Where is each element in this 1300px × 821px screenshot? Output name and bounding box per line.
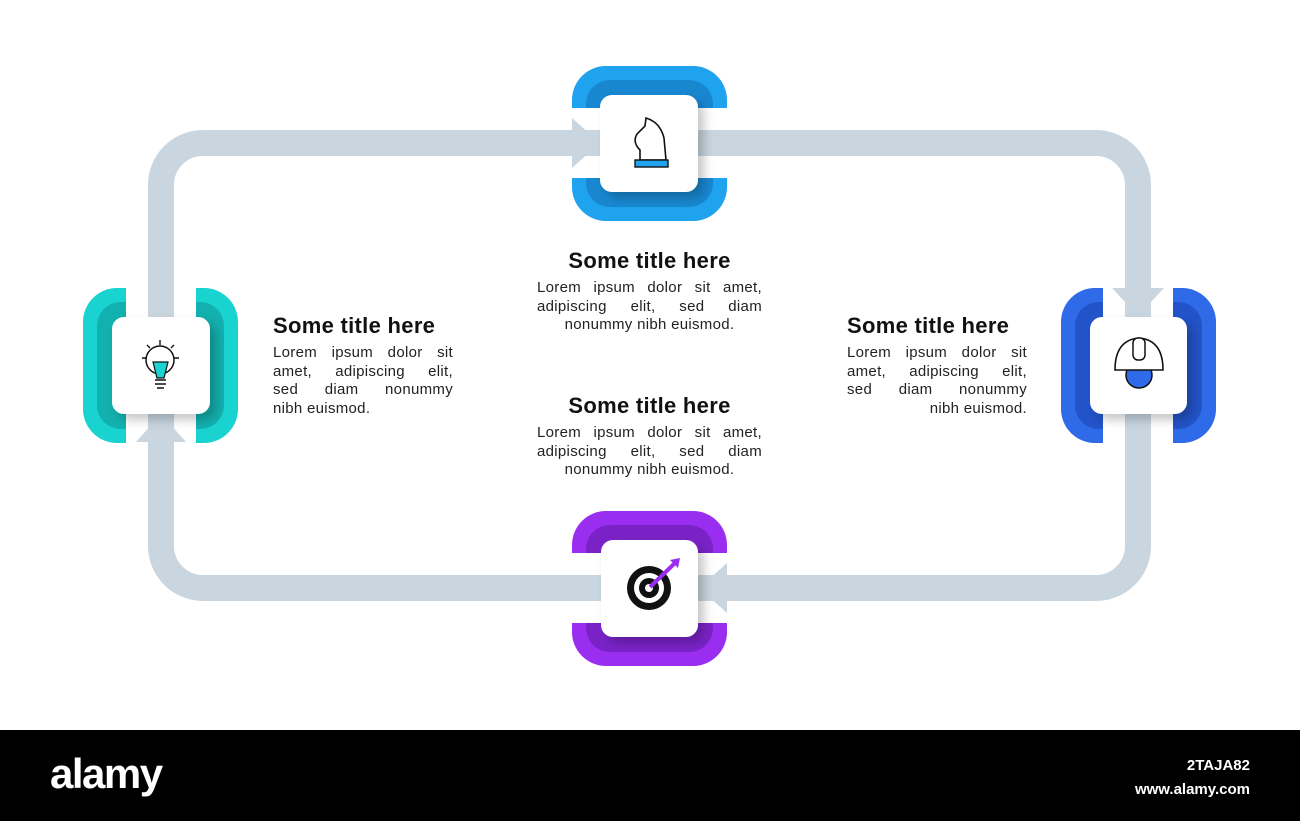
cycle path [161,143,1138,588]
text: bottom center: adipiscing elit, sed diam [537,442,762,460]
node: bottom [560,511,740,666]
text: top center: Some title here [568,248,731,273]
footer bar [0,730,1300,821]
image id: www.alamy.com [1135,781,1250,798]
text: right: Some title here [847,313,1009,338]
text: left: Lorem ipsum dolor sit [273,344,453,361]
text: right [847,313,1027,416]
text: right: nibh euismod. [930,400,1027,416]
text: left: nibh euismod. [273,400,370,416]
text: top center: adipiscing elit, sed diam [537,298,762,314]
text: top center [537,248,762,333]
text: bottom center [537,393,762,478]
text: left: amet, adipiscing elit, [273,362,453,380]
node: top [560,66,740,221]
image id: 2TAJA82 [1187,757,1250,774]
node: left [83,276,238,456]
text: right: Lorem ipsum dolor sit [847,344,1027,361]
text: left [273,313,453,416]
text: bottom center: Some title here [568,393,731,418]
image id [1135,757,1250,798]
node: right [1061,276,1216,456]
text: left: Some title here [273,313,435,338]
logo: alamy [50,750,162,797]
text: bottom center: Lorem ipsum dolor sit amet, [537,424,762,441]
text: right: amet, adipiscing elit, [847,362,1027,380]
text: top center: Lorem ipsum dolor sit amet, [537,279,762,296]
text: left: sed diam nonummy [273,381,453,398]
text: top center: nonummy nibh euismod. [565,316,734,333]
text: right: sed diam nonummy [847,381,1027,398]
text: bottom center: nonummy nibh euismod. [565,461,734,478]
